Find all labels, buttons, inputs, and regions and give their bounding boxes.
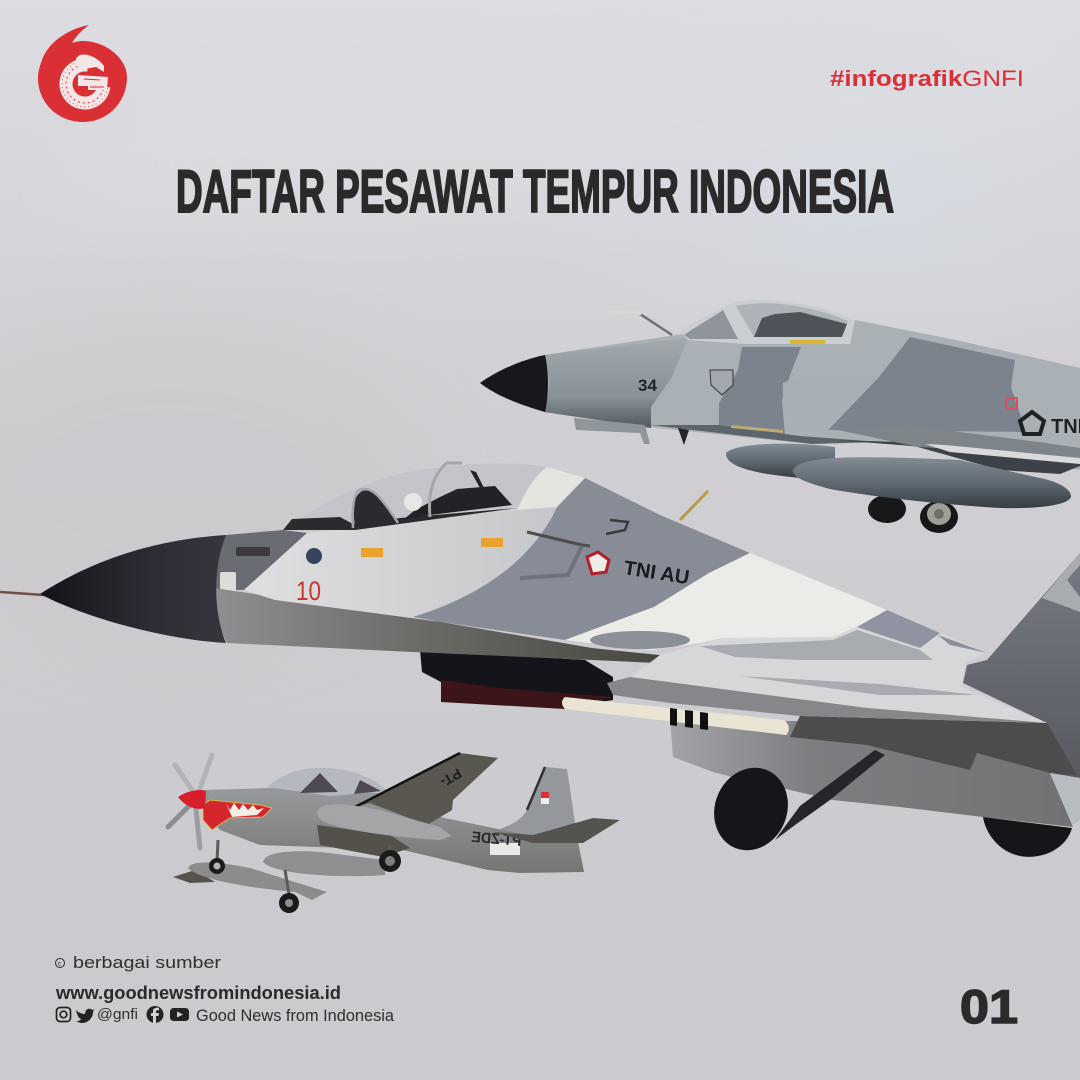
- intake: [420, 650, 613, 708]
- TNI AU: TNI AU: [622, 557, 691, 589]
- handle: @gnfi: [97, 1007, 138, 1023]
- hashtag: infografikGNFI: #infografik GNFI: [830, 66, 1024, 91]
- camouflage patches: [544, 337, 1026, 444]
- aircraft: A-4 Skyhawk: [480, 300, 1080, 533]
- fin: [493, 767, 583, 872]
- pitot: [0, 592, 44, 595]
- icon: youtube: [170, 1008, 189, 1021]
- dark underwing shadow: [790, 716, 1077, 775]
- squadron badge: [710, 370, 733, 395]
- spinner: [178, 790, 206, 809]
- landing gear: [209, 840, 401, 913]
- page name: Good News from Indonesia: [196, 1006, 395, 1025]
- source credit: berbagai sumber: [73, 953, 221, 972]
- canopy: [680, 300, 855, 344]
- radome: [40, 535, 226, 643]
- light rear stripe: [1050, 773, 1080, 825]
- landing gear: [702, 750, 1072, 861]
- nose gear doors: [574, 418, 650, 444]
- aircraft number: 34: [638, 376, 657, 395]
- landing gear: [868, 495, 958, 533]
- canopy: [283, 463, 547, 530]
- registration patch: [490, 843, 520, 855]
- registration: PT-ZDE: [471, 829, 522, 850]
- belly shadow: [317, 825, 410, 857]
- fuselage: [544, 320, 1080, 470]
- icon: instagram: [56, 1008, 70, 1022]
- wing: [838, 426, 1080, 458]
- tail fin: [963, 553, 1080, 778]
- lower body: [214, 588, 680, 664]
- refuelling probe: [612, 312, 672, 335]
- wing code: PT-: [437, 765, 464, 790]
- canopy: [267, 768, 387, 796]
- website url: www.goodnewsfromindonesia.id: [55, 983, 341, 1003]
- antenna: [680, 491, 708, 520]
- icon: facebook: [146, 1006, 164, 1023]
- propeller: [168, 755, 212, 848]
- missile: [562, 697, 789, 735]
- TNI marking: [1020, 412, 1044, 434]
- social row: [56, 1006, 395, 1025]
- logo: GNFI red six emblem: [38, 25, 127, 122]
- upper wing: [355, 753, 498, 825]
- shark mouth: [203, 800, 272, 830]
- icon: twitter: [76, 1009, 94, 1023]
- fuel tanks: [726, 444, 835, 478]
- page number: 01: [960, 980, 1018, 1033]
- nose grey: [214, 530, 307, 590]
- aircraft: Su-30: [0, 463, 1080, 861]
- wing underside plate: [607, 677, 1047, 723]
- pylon dark: [835, 440, 1080, 474]
- nacelle: [670, 720, 1073, 827]
- white wing root: [565, 553, 887, 650]
- aircraft: Super Tucano: [168, 753, 620, 913]
- fuselage: [203, 788, 584, 873]
- aircraft number 10: 10: [296, 576, 321, 606]
- tailplane: [493, 818, 620, 843]
- yellow marking: [790, 340, 825, 344]
- markings: [306, 520, 628, 578]
- wing: [630, 610, 1047, 723]
- fuel tanks: [317, 804, 452, 840]
- grey mid fuselage: [413, 478, 750, 640]
- lower wing: [173, 870, 215, 883]
- source credit: c: [58, 960, 62, 967]
- radome: [480, 355, 548, 412]
- white fairing: [517, 467, 585, 510]
- light forward panel: [244, 505, 558, 622]
